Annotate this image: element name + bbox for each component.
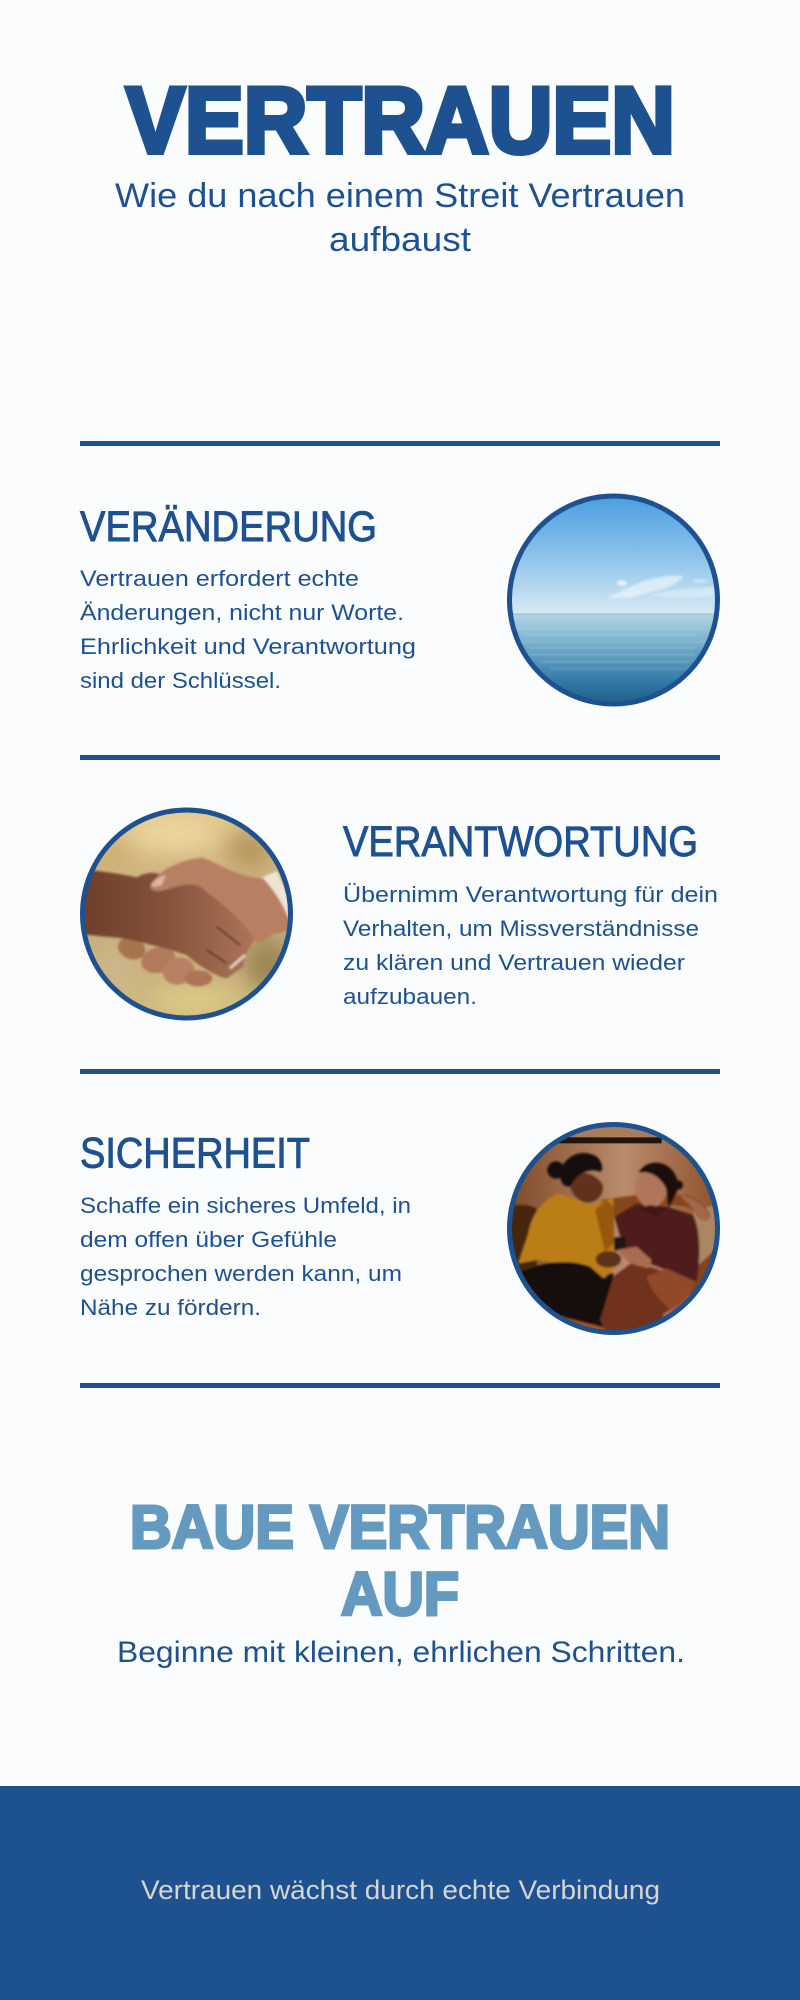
text block: Verantwortung (343, 882, 718, 1009)
maroon sweater (614, 1203, 699, 1282)
text block: Sicherheit: dem offen über Gefühle (80, 1227, 337, 1252)
heading: Veränderung: VERÄNDERUNG (80, 504, 377, 551)
text block: Veränderung: Ehrlichkeit und Verantwortung (80, 634, 416, 659)
dark hand (77, 870, 255, 978)
dark trousers (522, 1262, 613, 1323)
text block: Veränderung: sind der Schlüssel. (80, 668, 281, 693)
footer band (0, 1786, 800, 2000)
text block: Sicherheit (80, 1193, 411, 1320)
text block: Sicherheit: Nähe zu fördern. (80, 1295, 261, 1320)
text block: Verantwortung: aufzubauen. (343, 984, 477, 1009)
image: two women talking on a sofa (503, 1120, 723, 1340)
subtitle: Wie du nach einem Streit Vertrauen (115, 177, 685, 215)
rust trousers (598, 1262, 670, 1330)
text block: Veränderung: Vertrauen erfordert echte (80, 566, 359, 591)
lower fingers (117, 938, 146, 961)
footer text: Vertrauen wächst durch echte Verbindung (141, 1875, 660, 1905)
panel: Verantwortung (77, 803, 718, 1023)
call to action heading: AUF (341, 1560, 459, 1628)
subtitle (115, 177, 685, 259)
yellow sweater (518, 1193, 614, 1280)
divider 1 (80, 441, 720, 446)
text block: Sicherheit: Schaffe ein sicheres Umfeld, in (80, 1193, 411, 1218)
image: calm sea under blue sky (505, 490, 725, 714)
call to action heading: BAUE VERTRAUEN (130, 1493, 670, 1561)
text block: Verantwortung: Verhalten, um Missverständnisse (343, 916, 699, 941)
right woman head (635, 1172, 667, 1208)
divider 4 (80, 1383, 720, 1388)
heading: Sicherheit: SICHERHEIT (80, 1130, 310, 1178)
text block: Verantwortung: Übernimm Verantwortung für dein (343, 882, 718, 907)
panel: Veränderung (80, 490, 725, 714)
sofa (512, 1204, 538, 1274)
divider 2 (80, 755, 720, 760)
subtitle: aufbaust (329, 221, 472, 259)
heading: Verantwortung: VERANTWORTUNG (343, 819, 698, 866)
image: handshake (77, 803, 297, 1023)
raised arm (600, 1195, 710, 1221)
light hand and wrist (150, 858, 292, 943)
text block: Verantwortung: zu klären und Vertrauen wieder (343, 950, 686, 975)
hands and phone (596, 1251, 621, 1268)
white cuff (260, 870, 288, 920)
title: VERTRAUEN (126, 68, 675, 172)
divider 3 (80, 1069, 720, 1074)
panel: Sicherheit (80, 1120, 723, 1340)
left woman head (568, 1173, 603, 1203)
call to action heading (130, 1493, 670, 1628)
text block: Sicherheit: gesprochen werden kann, um (80, 1261, 402, 1286)
text block: Veränderung (80, 566, 416, 693)
text block: Veränderung: Änderungen, nicht nur Worte. (80, 600, 404, 625)
call to action text: Beginne mit kleinen, ehrlichen Schritten. (117, 1636, 685, 1669)
